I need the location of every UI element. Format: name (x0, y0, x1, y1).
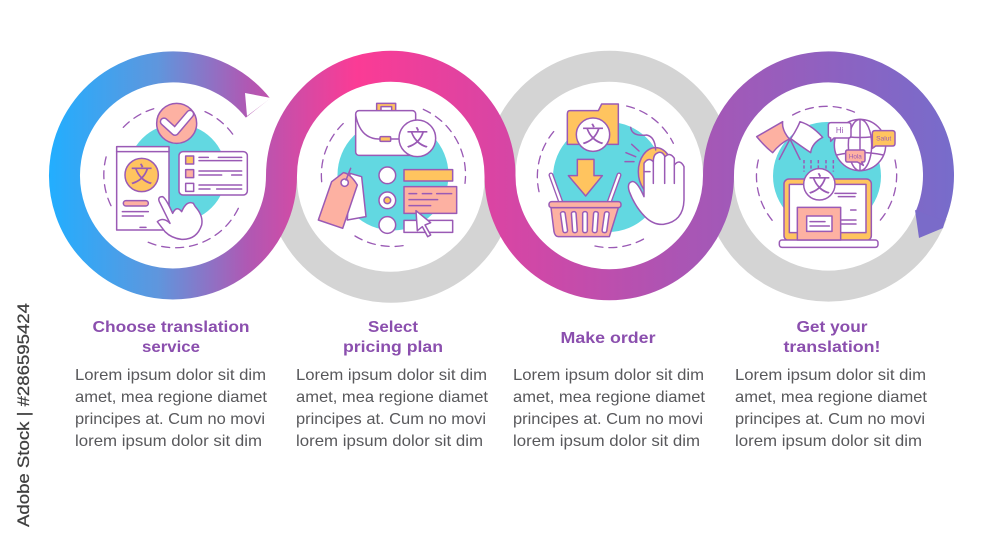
icon: pricing plan: 文 (406, 126, 428, 151)
text block: step 3: principes at. Cum no movi (513, 411, 703, 428)
icon: pricing plan (318, 103, 466, 246)
text block: step 2: Lorem ipsum dolor sit dim (296, 367, 487, 384)
heading: step 2: Select (368, 319, 419, 336)
text block: step 1: Lorem ipsum dolor sit dim (75, 367, 266, 384)
step 3 teal circle (553, 122, 663, 232)
step 1 teal circle (128, 124, 226, 222)
heading: step 1 (92, 319, 250, 356)
icon: laptop, flags and globe: Hi (836, 126, 844, 135)
text block: step 1: principes at. Cum no movi (75, 411, 265, 428)
heading: step 2 (343, 319, 443, 356)
step 2 teal circle (338, 120, 448, 230)
text block: step 2: lorem ipsum dolor sit dim (296, 433, 483, 450)
text block: step 2: principes at. Cum no movi (296, 411, 486, 428)
text block: step 3 (513, 367, 706, 450)
icon: laptop, flags and globe: 文 (808, 172, 830, 197)
heading: step 1: Choose translation (92, 319, 250, 336)
heading: step 4: Get your (796, 319, 868, 336)
text block: step 1: lorem ipsum dolor sit dim (75, 433, 262, 450)
text block: step 1: amet, mea regione diamet (75, 389, 268, 406)
icon: order basket and mouse (537, 104, 684, 248)
text block: step 4: principes at. Cum no movi (735, 411, 925, 428)
text block: step 4 (735, 367, 928, 450)
icon: phone translation service (104, 103, 247, 248)
text block: step 3: amet, mea regione diamet (513, 389, 706, 406)
icon: laptop, flags and globe: Hola (849, 153, 862, 160)
text block: step 1 (75, 367, 268, 450)
stock credit vertical text: Adobe Stock | #286595424 (14, 303, 33, 527)
text block: step 2 (296, 367, 489, 450)
grey ring segments (282, 66, 932, 287)
heading: step 4: translation! (784, 339, 880, 356)
step 4 teal circle (773, 122, 881, 230)
heading: step 3: Make order (560, 330, 656, 347)
icon: phone translation service: 文 (131, 163, 153, 188)
heading: step 4 (784, 319, 880, 356)
icon: laptop, flags and globe (756, 106, 897, 247)
heading: step 1: service (142, 339, 200, 356)
text block: step 4: lorem ipsum dolor sit dim (735, 433, 922, 450)
text block: step 4: Lorem ipsum dolor sit dim (735, 367, 926, 384)
icon: laptop, flags and globe: Salut (876, 136, 891, 143)
text block: step 2: amet, mea regione diamet (296, 389, 489, 406)
heading: step 2: pricing plan (343, 339, 443, 356)
icon: order basket and mouse: 文 (582, 122, 604, 147)
text block: step 3: Lorem ipsum dolor sit dim (513, 367, 704, 384)
text block: step 4: amet, mea regione diamet (735, 389, 928, 406)
gradient ribbon with arrow ends (65, 66, 945, 285)
text block: step 3: lorem ipsum dolor sit dim (513, 433, 700, 450)
